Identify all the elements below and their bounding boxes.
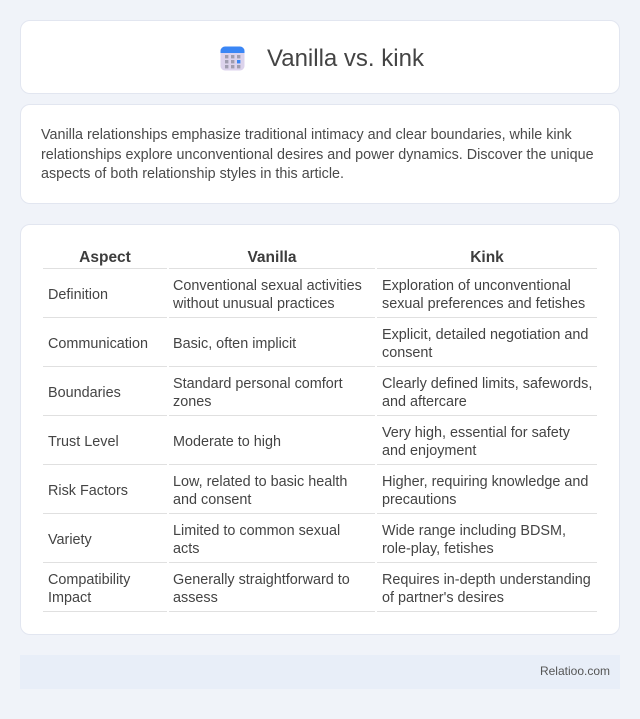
row: variety: role-play, fetishes (382, 541, 494, 557)
row: definition (48, 278, 585, 312)
row: boundaries (48, 376, 592, 410)
row: trust level: Moderate to high (173, 434, 281, 450)
row: trust level: and enjoyment (382, 443, 476, 459)
row: compatibility impact: of partner's desires (382, 590, 504, 606)
table panel (20, 224, 620, 635)
row: boundaries: Clearly defined limits, safewords, (382, 376, 592, 392)
row: variety: Variety (48, 532, 92, 548)
row: variety (48, 523, 566, 557)
row: risk factors: Higher, requiring knowledge and (382, 474, 588, 490)
row: compatibility impact: Requires in-depth understanding (382, 572, 591, 588)
row: risk factors: Risk Factors (48, 483, 128, 499)
row: compatibility impact: Compatibility (48, 572, 130, 588)
table header: Vanilla (247, 249, 297, 266)
row: boundaries: Standard personal comfort (173, 376, 343, 392)
row: communication: Communication (48, 336, 148, 352)
row: boundaries: and aftercare (382, 394, 467, 410)
footer credit: Relatioo.com (540, 664, 610, 678)
title: Vanilla vs. kink (267, 45, 424, 72)
row: communication: Basic, often implicit (173, 336, 296, 352)
row: definition: Definition (48, 287, 108, 303)
row: compatibility impact: Impact (48, 590, 91, 606)
table header: Kink (470, 249, 504, 266)
row: communication (48, 327, 588, 361)
row: compatibility impact: assess (173, 590, 218, 606)
table header: Aspect (79, 249, 131, 266)
intro text: relationships explore unconventional desires and power dynamics. Discover the unique (41, 146, 594, 162)
intro text: aspects of both relationship styles in this article. (41, 166, 344, 182)
row: risk factors: and consent (173, 492, 251, 508)
row: trust level: Trust Level (48, 434, 119, 450)
row: risk factors (48, 474, 588, 508)
row: risk factors: Low, related to basic health (173, 474, 347, 490)
row: communication: consent (382, 345, 432, 361)
row: definition: without unusual practices (173, 296, 335, 312)
row: variety: Limited to common sexual (173, 523, 340, 539)
table header (79, 249, 504, 266)
row: trust level: Very high, essential for safety (382, 425, 570, 441)
row: compatibility impact (48, 572, 591, 606)
intro text (41, 127, 594, 182)
row: variety: acts (173, 541, 199, 557)
row: risk factors: precautions (382, 492, 456, 508)
row: boundaries: Boundaries (48, 385, 121, 401)
row: compatibility impact: Generally straightforward to (173, 572, 350, 588)
row: trust level (48, 425, 570, 459)
footer bar (20, 655, 620, 689)
row: definition: sexual preferences and fetishes (382, 296, 585, 312)
row: communication: Explicit, detailed negotiation and (382, 327, 588, 343)
row: definition: Exploration of unconventional (382, 278, 571, 294)
row: boundaries: zones (173, 394, 211, 410)
row: variety: Wide range including BDSM, (382, 523, 566, 539)
icon: calendar (220, 46, 244, 70)
intro panel (20, 104, 620, 204)
intro text: Vanilla relationships emphasize traditional intimacy and clear boundaries, while kink (41, 127, 572, 143)
header panel (20, 20, 620, 94)
row: definition: Conventional sexual activities (173, 278, 362, 294)
